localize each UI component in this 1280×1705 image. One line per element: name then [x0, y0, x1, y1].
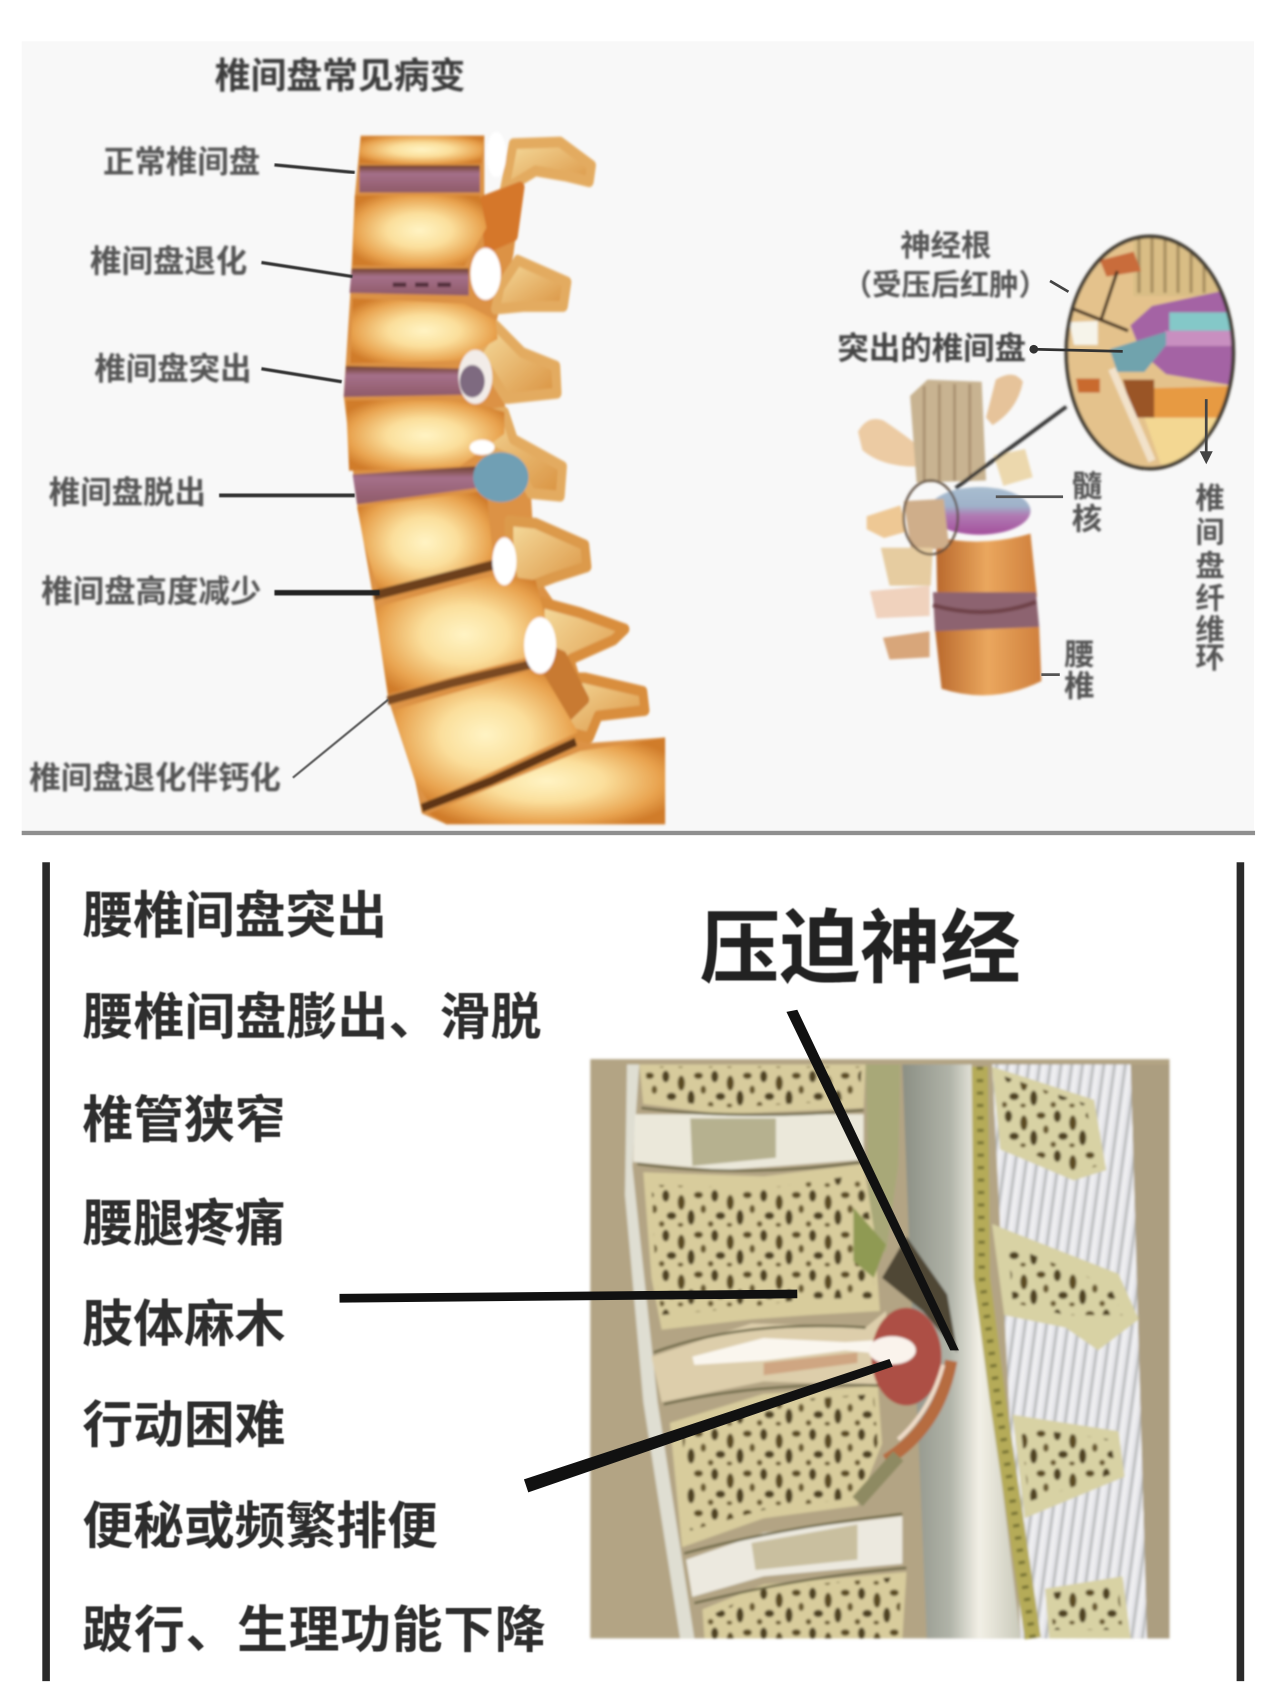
label: nucleus: 髓 [1072, 470, 1102, 504]
label: degeneration with calcification: 椎间盘退化伴钙化 [29, 761, 281, 796]
left border bar [42, 862, 50, 1681]
leader: protruding disc [1029, 345, 1123, 354]
heading: common disc lesions: 椎间盘常见病变 [215, 56, 465, 96]
label: red and swollen after compression: （受压后红肿） [843, 269, 1048, 302]
symptom list: 腰腿疼痛 [82, 1195, 285, 1252]
label: nucleus: 核 [1072, 502, 1102, 536]
label: normal disc: 正常椎间盘 [103, 144, 260, 179]
right border bar [1237, 862, 1244, 1681]
pointer: line to herniated disc [524, 1359, 893, 1492]
label: damaged annulus fibrosus [1195, 483, 1225, 675]
symptom list: 跛行、生理功能下降 [82, 1602, 546, 1659]
label: prolapsed disc: 椎间盘脱出 [49, 475, 206, 510]
label: bulging disc: 椎间盘突出 [94, 352, 252, 387]
illustration: side view of lumbar spine [344, 132, 665, 824]
pointer: horizontal line to vertebra [340, 1294, 797, 1298]
leader: degenerated disc [261, 262, 353, 277]
symptom list: 行动困难 [82, 1397, 285, 1454]
divider between panels [22, 831, 1255, 835]
leader: normal disc [274, 165, 355, 172]
symptom list: 腰椎间盘膨出、滑脱 [82, 989, 541, 1046]
label: lumbar vertebra [1064, 639, 1094, 703]
label: damaged annulus fibrosus: 椎 [1195, 483, 1225, 516]
panel background [22, 41, 1254, 831]
label: lumbar vertebra: 椎 [1064, 669, 1094, 703]
symptom list: 肢体麻木 [82, 1296, 285, 1353]
label: nerve root: 神经根 [900, 229, 991, 263]
leader: nerve root [1050, 281, 1068, 292]
leader: prolapsed disc [219, 493, 355, 497]
magnified circle: disc detail [1066, 236, 1237, 469]
label: lumbar vertebra: 腰 [1064, 639, 1094, 672]
label: damaged annulus fibrosus: 纤 [1195, 582, 1225, 615]
label: nucleus [1072, 470, 1102, 536]
label: reduced disc height: 椎间盘高度减少 [41, 574, 261, 609]
label: protruding disc: 突出的椎间盘 [837, 331, 1026, 366]
leader: nucleus [996, 495, 1063, 498]
panel: lumbar disc herniation [42, 862, 1244, 1681]
leader: lumbar vertebra [1041, 673, 1060, 676]
illustration: spinal cross-section [590, 1059, 1169, 1638]
label: damaged annulus fibrosus: 间 [1195, 516, 1225, 549]
symptom list: 腰椎间盘突出 [82, 887, 387, 944]
symptom list: 椎管狭窄 [82, 1092, 285, 1149]
label: damaged annulus fibrosus: 环 [1195, 642, 1225, 675]
symptom list: 便秘或频繁排便 [82, 1497, 438, 1554]
label: damaged annulus fibrosus: 维 [1195, 614, 1225, 647]
arrow: annulus fibrosus [1200, 399, 1213, 464]
label: damaged annulus fibrosus: 盘 [1195, 550, 1225, 583]
leader: reduced disc height [274, 590, 380, 595]
symptom list [82, 887, 546, 1659]
label: degenerated disc: 椎间盘退化 [90, 244, 247, 279]
panel: common disc lesions [22, 41, 1254, 831]
callout: nerve compression: 压迫神经 [700, 904, 1021, 994]
pointer: line from callout to nerve [786, 1010, 959, 1350]
illustration: lumbar vertebra with disc [858, 375, 1066, 695]
leader: bulging disc [261, 369, 342, 382]
leader: calcified disc [293, 700, 388, 778]
